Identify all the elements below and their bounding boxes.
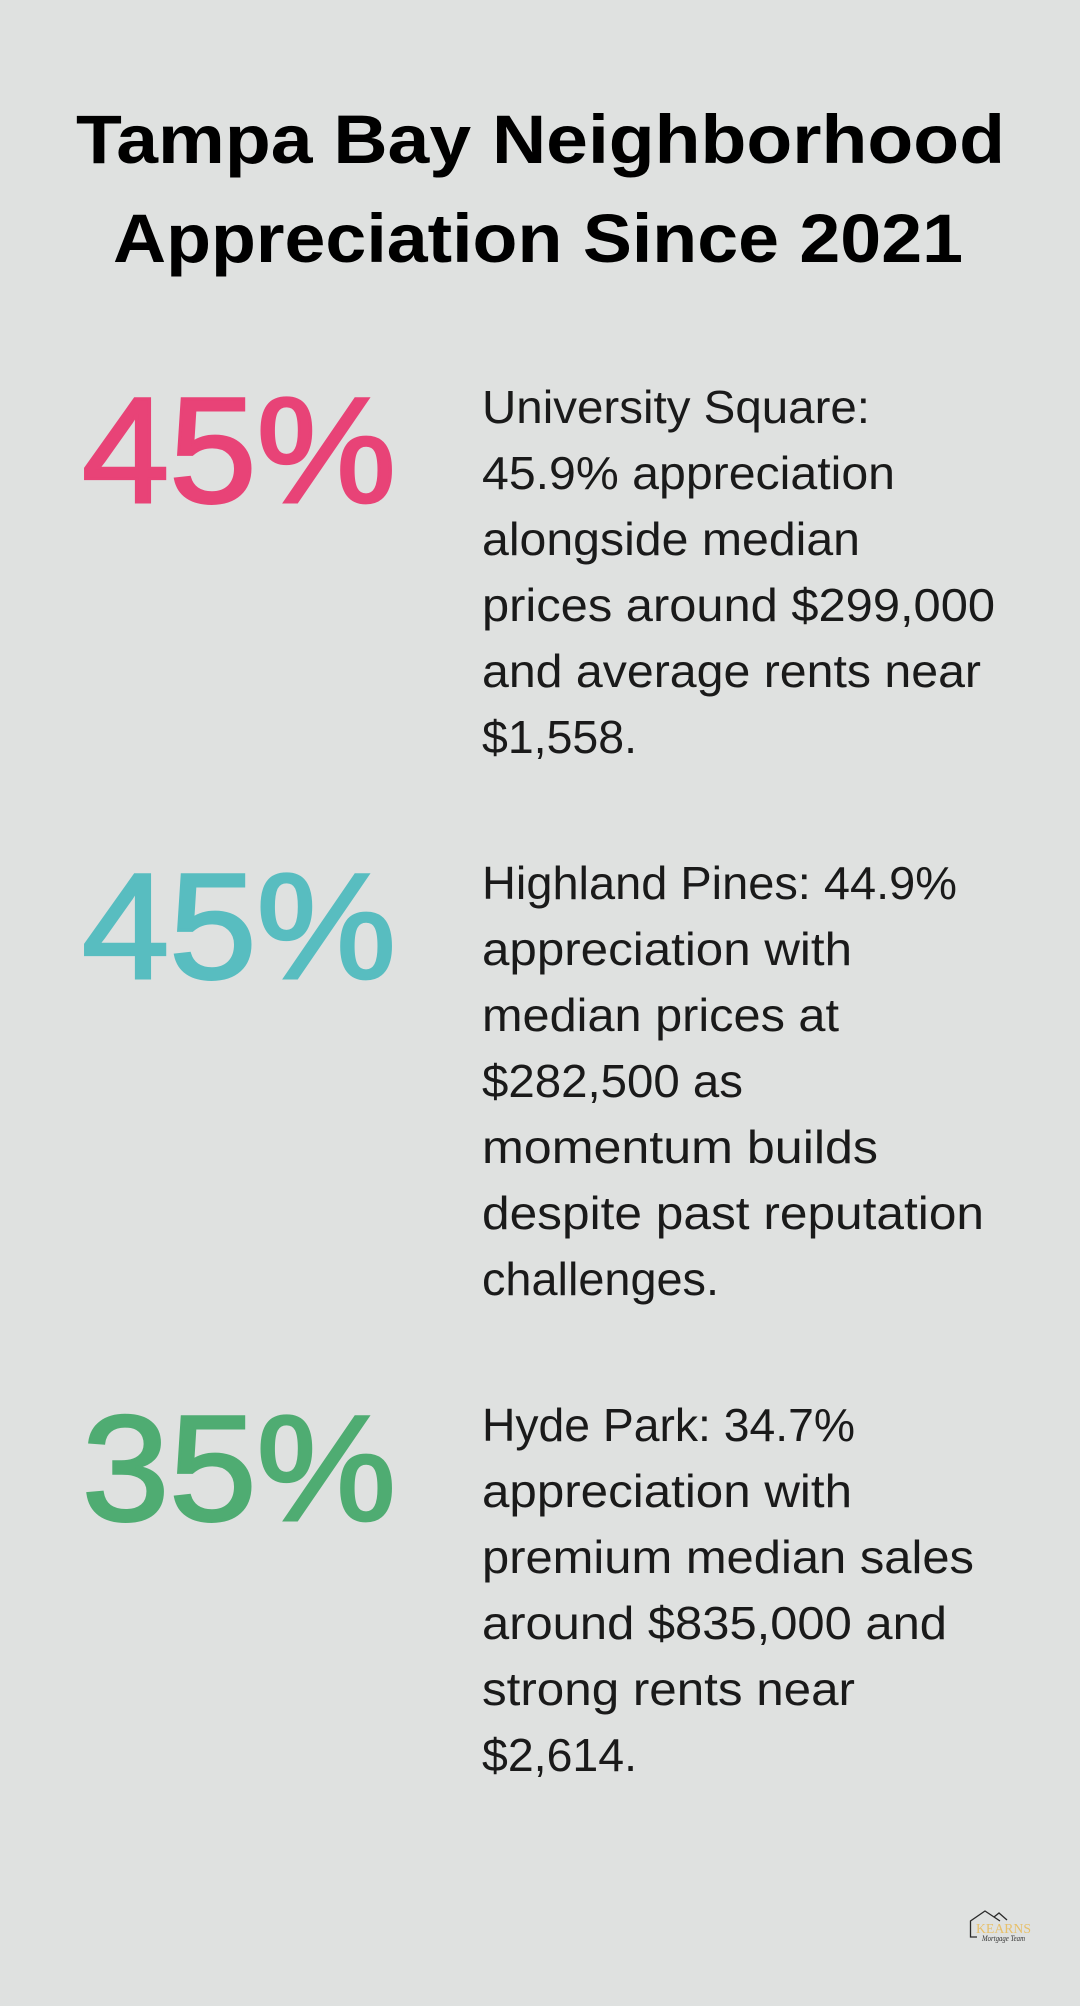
title: Tampa Bay Neighborhood [76, 101, 1005, 178]
text block: Highland Pines: despite past reputation [482, 1187, 984, 1239]
icon: Kearns Mortgage Team logo: KEARNS [976, 1921, 1031, 1936]
text block: University Square: 45.9% appreciation [482, 447, 895, 499]
stat: 45% teal: 45% [82, 842, 396, 1010]
title [76, 101, 1005, 277]
text block: Highland Pines: challenges. [482, 1253, 719, 1305]
text block: Hyde Park: appreciation with [482, 1465, 852, 1517]
text block: Hyde Park: strong rents near [482, 1663, 855, 1715]
panel: Highland Pines [82, 842, 984, 1305]
text block: University Square: alongside median [482, 513, 860, 565]
title: Appreciation Since 2021 [113, 200, 963, 277]
text block: Highland Pines: Highland Pines: 44.9% [482, 857, 957, 909]
stat: 45% pink: 45% [82, 366, 396, 534]
stat: 35% green: 35% [82, 1384, 396, 1552]
icon: Kearns Mortgage Team logo: Mortgage Team [981, 1933, 1025, 1943]
text block: Hyde Park: Hyde Park: 34.7% [482, 1399, 855, 1451]
panel: Hyde Park [82, 1384, 974, 1781]
text block: University Square: $1,558. [482, 711, 637, 763]
text block: Hyde Park: $2,614. [482, 1729, 637, 1781]
text block: Highland Pines: $282,500 as [482, 1055, 743, 1107]
text block: Hyde Park [482, 1399, 974, 1781]
text block: Highland Pines: appreciation with [482, 923, 852, 975]
text block: Highland Pines: median prices at [482, 989, 839, 1041]
text block: University Square: and average rents near [482, 645, 981, 697]
text block: University Square [482, 381, 995, 763]
text block: University Square: prices around $299,000 [482, 579, 995, 631]
icon: Kearns Mortgage Team logo [970, 1911, 1031, 1943]
text block: Highland Pines [482, 857, 984, 1305]
text block: University Square: University Square: [482, 381, 870, 433]
text block: Hyde Park: premium median sales [482, 1531, 974, 1583]
panel: University Square [82, 366, 995, 763]
text block: Highland Pines: momentum builds [482, 1121, 878, 1173]
text block: Hyde Park: around $835,000 and [482, 1597, 947, 1649]
